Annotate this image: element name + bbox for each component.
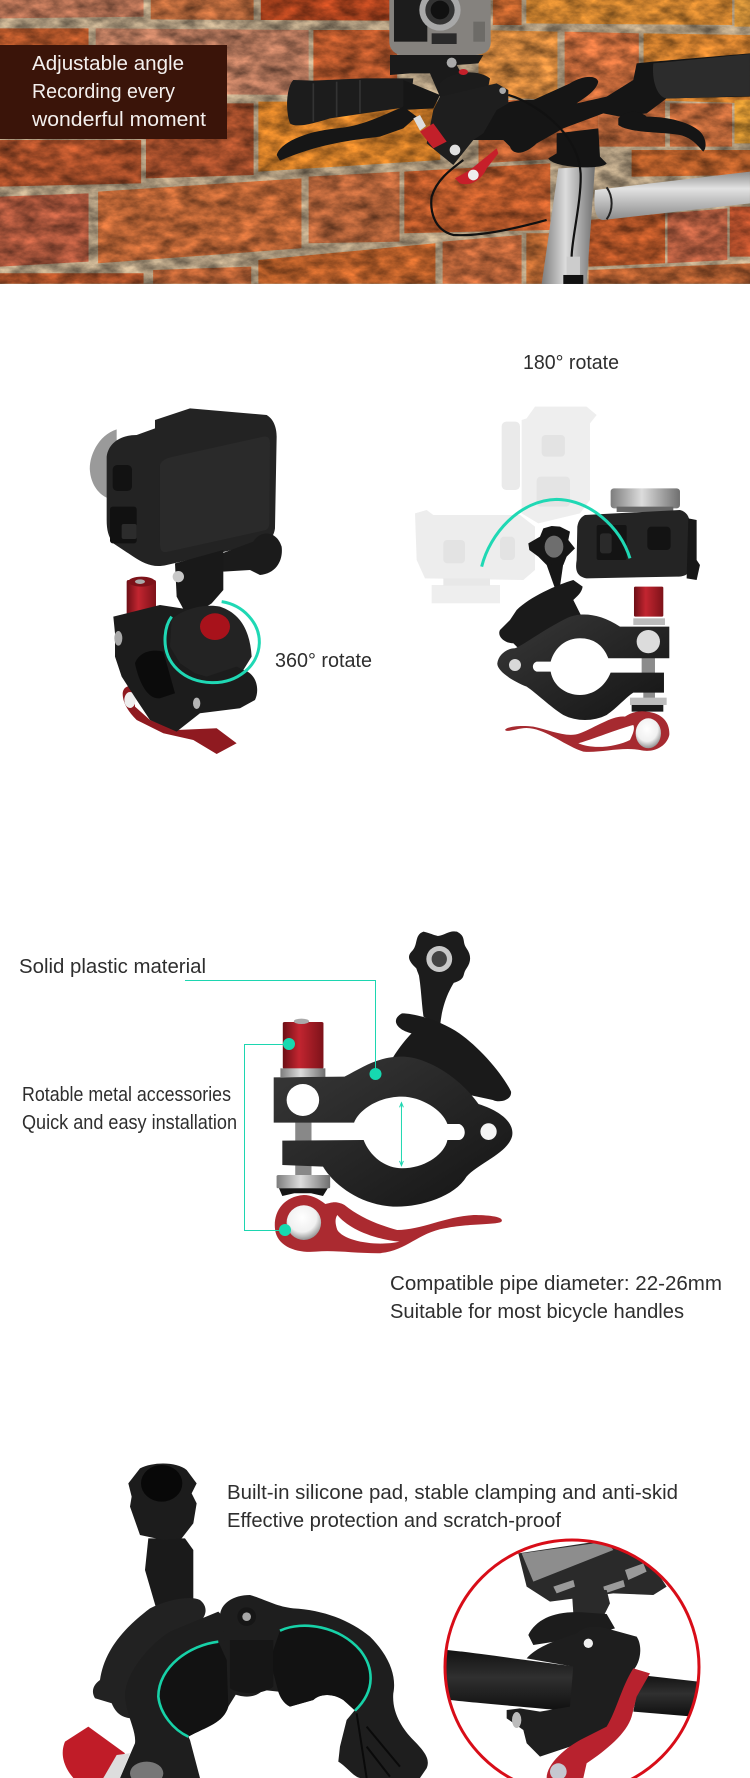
brick wall [0,0,750,284]
pad text: Effective protection and scratch-proof [227,1510,561,1532]
caption text [31,53,206,131]
camera body [107,408,277,566]
panel: silicone pad [63,1464,700,1778]
panel: rotation views [90,352,700,754]
knob [128,1464,197,1540]
product: clamp diagram [274,931,512,1253]
label: compatible diameter: Compatible pipe diameter: 22-26mm [390,1273,722,1295]
clamp [427,83,508,165]
clamp [497,615,669,720]
rotating plate [392,1013,511,1101]
dark camera [611,488,680,508]
panel: hero photo [0,0,750,284]
label: compatible diameter [390,1273,722,1323]
teal pad arcs [158,1626,371,1737]
pad text: Built-in silicone pad, stable clamping and anti-skid [227,1482,678,1504]
teal arc [482,499,630,567]
side knob [213,533,282,575]
caption text: Adjustable angle [32,53,184,75]
knob [440,72,490,98]
product: mount with camera, 180 view [415,407,700,752]
cable [431,95,581,257]
bar right [633,1675,698,1717]
stem collar [548,128,607,167]
diameter arrow [400,1103,403,1166]
red quick release lever [275,1195,502,1253]
screen [160,437,270,552]
label: 180 rotate: 180° rotate [523,352,619,374]
red bolt [127,580,156,620]
faded camera vertical [502,407,597,523]
caption box [0,45,227,139]
clamp [113,605,257,732]
arm [547,563,563,588]
red knob [63,1727,125,1778]
left brake lever [277,107,417,161]
mount arm [175,550,223,618]
clamp right arm [220,1595,428,1778]
arm [145,1538,193,1610]
inner pads [158,1642,228,1737]
label: metal accessories [22,1084,237,1134]
knob plate [499,580,583,653]
holes [287,1084,319,1116]
pad text [227,1482,678,1532]
inset circle [445,1540,699,1778]
mount arm [572,1590,610,1614]
hinge [232,1686,273,1693]
nut [630,698,667,705]
left grip [287,78,413,125]
grille [357,1713,400,1778]
gear disc [93,1598,206,1720]
right grip [653,54,750,99]
camera dial [90,429,117,500]
star knob [528,526,575,565]
bar left [445,1650,577,1712]
red bolt [634,587,663,617]
camera [518,1540,667,1602]
callout dots [279,1038,382,1236]
red bolt [420,123,447,148]
knob [170,606,252,677]
star knob [409,931,470,983]
red lever [547,1668,650,1778]
knob [528,1612,615,1645]
camera body [389,0,491,55]
label: 360 rotate: 360° rotate [275,650,372,672]
mount [390,55,483,97]
right brake lever [618,112,706,152]
silver screw [295,1122,312,1142]
clamp left arm [120,1612,237,1778]
red lever [123,686,237,754]
label: solid plastic: Solid plastic material [19,956,206,978]
silver stem [542,167,595,284]
nut [277,1175,330,1188]
product: clamp close-up [63,1464,428,1778]
clamp [507,1627,640,1757]
label: compatible diameter: Suitable for most bicycle handles [390,1301,684,1323]
red cap [200,613,230,640]
right side bar [473,53,750,153]
caption text: Recording every [32,81,175,103]
silver tube [594,172,750,220]
red bolt [283,1022,323,1069]
red lever [505,711,669,752]
panel: material callouts [19,931,722,1323]
faded camera horizontal [415,510,535,603]
clamp body [274,1057,512,1207]
caption text: wonderful moment [31,109,206,131]
label: metal accessories: Quick and easy installation [22,1112,237,1134]
arm [416,963,462,1025]
teal ellipse arc [165,602,259,683]
red quick release [455,148,498,184]
callout lines [185,980,376,1230]
side buttons [113,465,132,491]
inset photo [445,1539,700,1778]
label: metal accessories: Rotable metal accessories [22,1084,231,1106]
bicycle and camera [277,0,750,284]
silver screw [642,657,655,675]
product: mount with camera, 360 view [90,408,282,754]
